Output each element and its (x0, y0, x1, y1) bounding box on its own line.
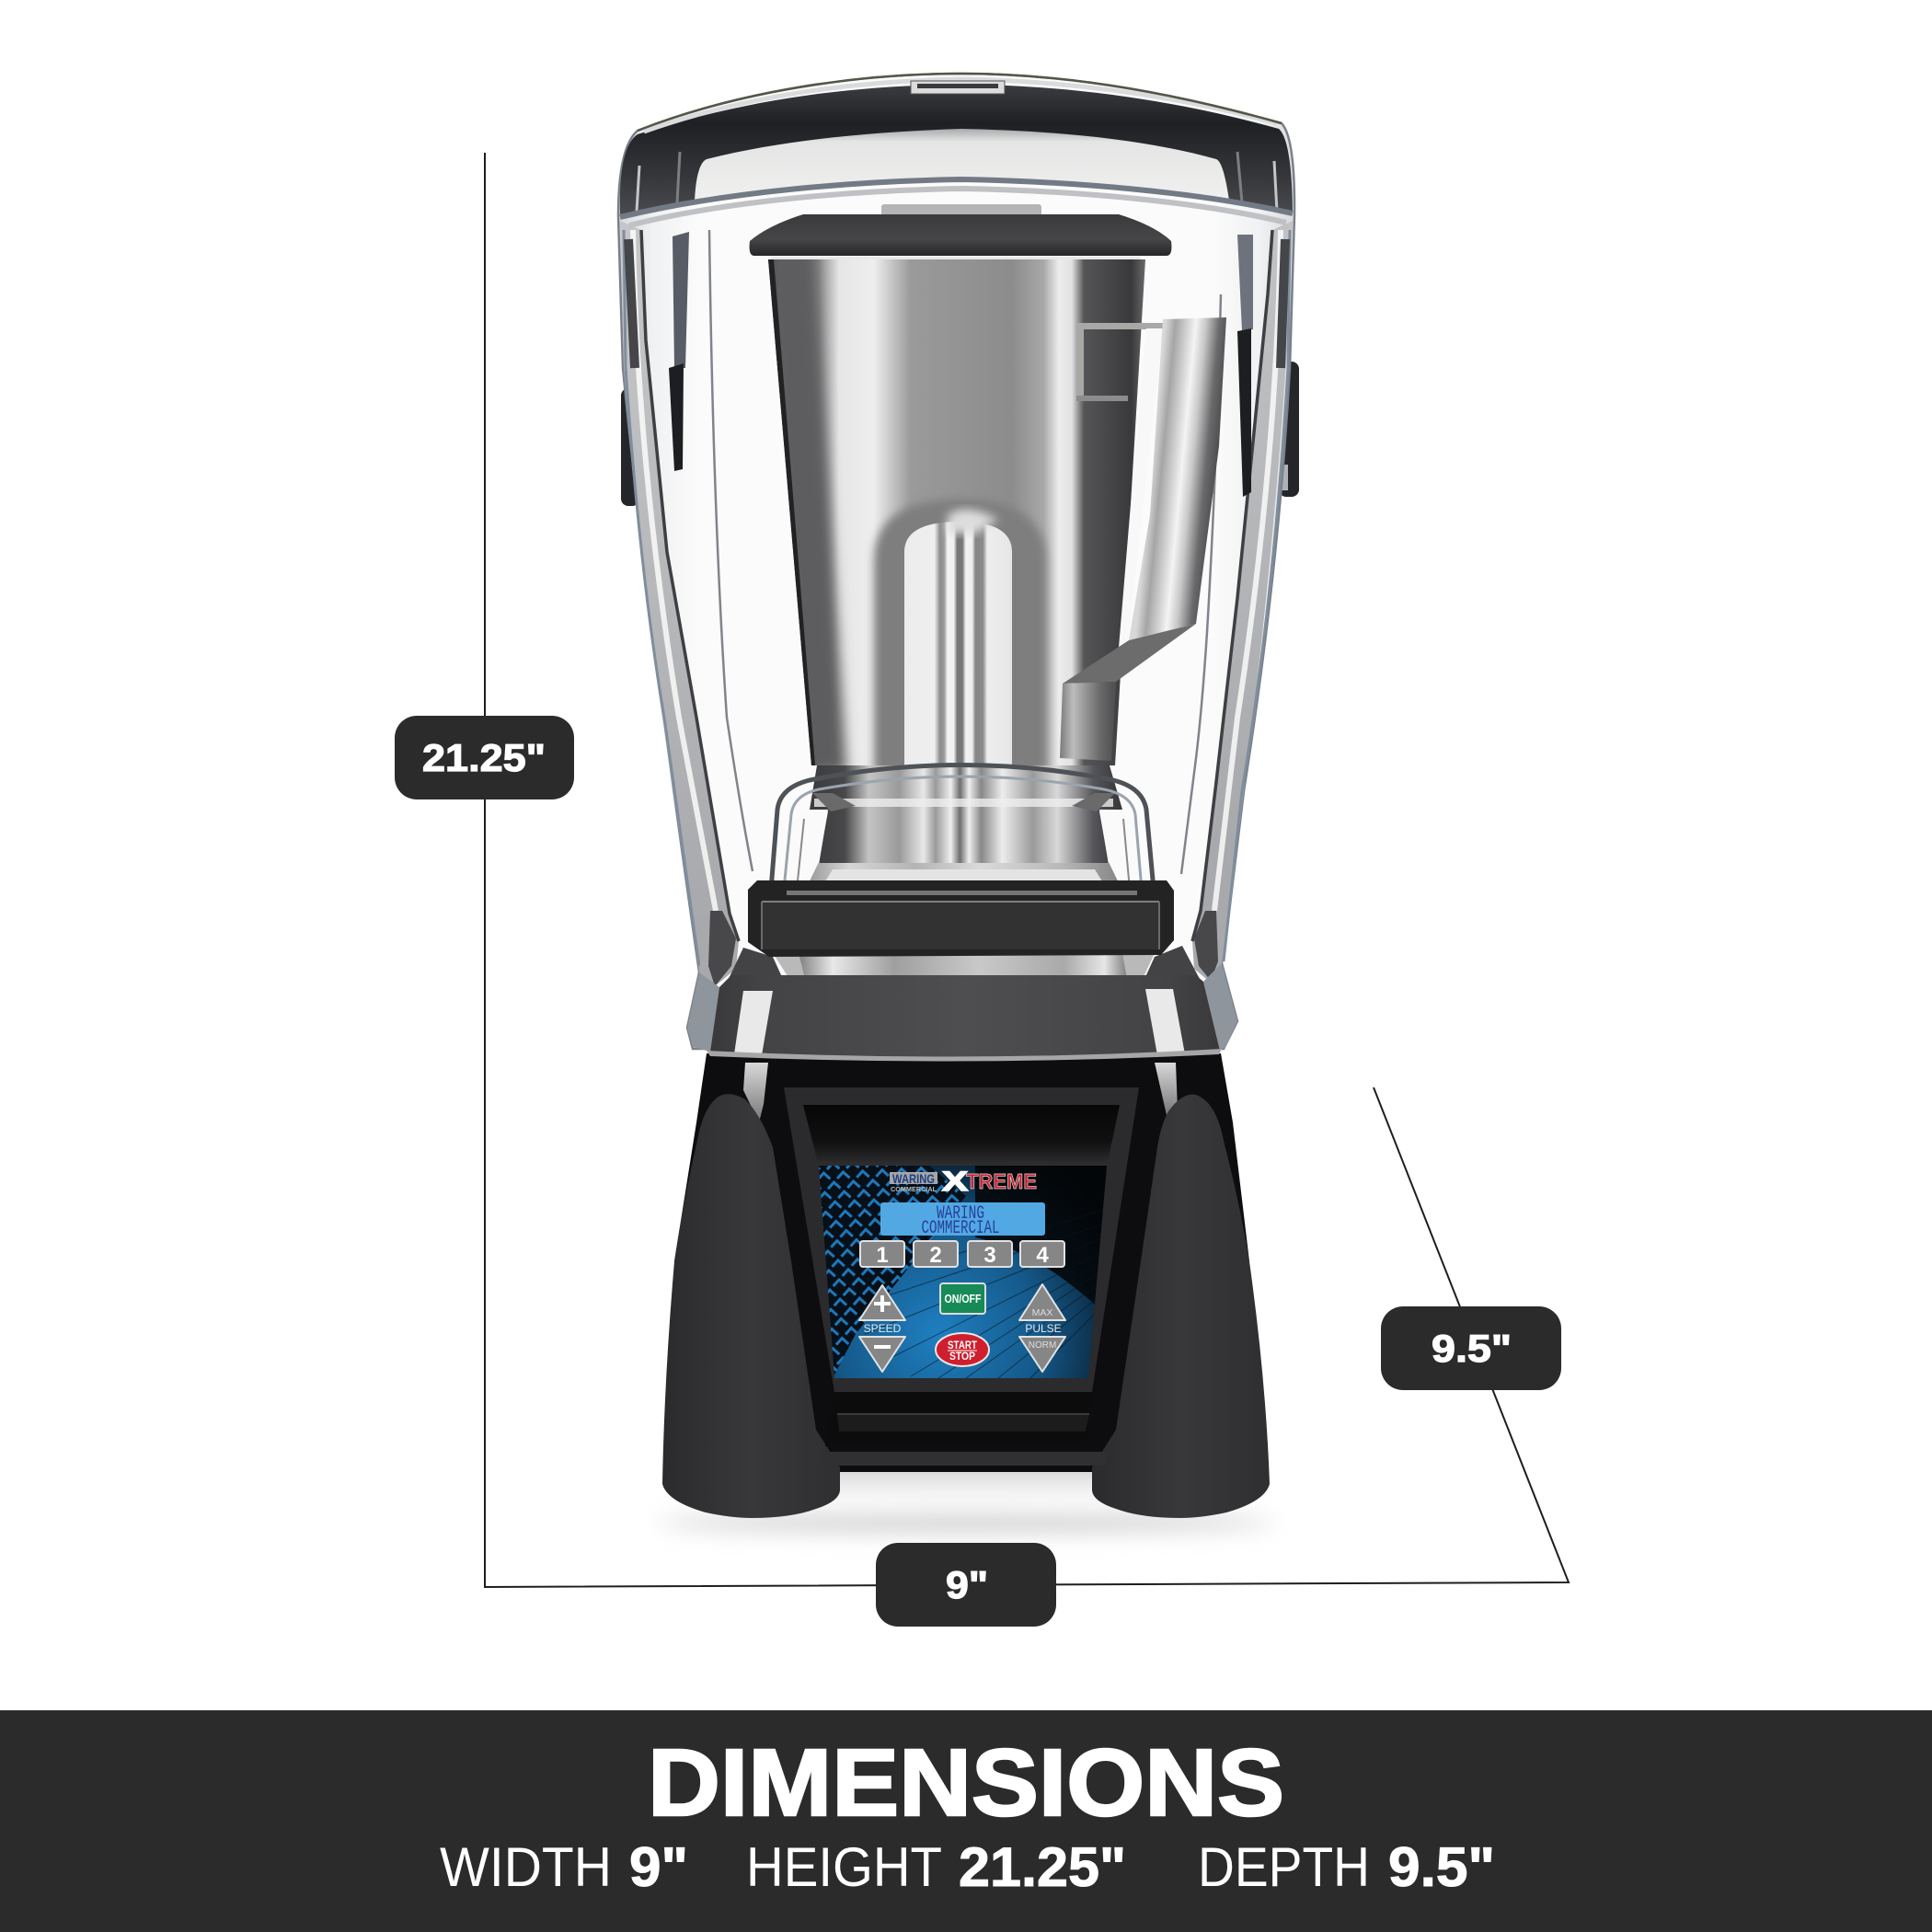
footer banner (0, 1710, 1932, 1932)
enclosure flare: right (1203, 963, 1237, 1051)
width label (876, 1543, 1056, 1627)
preset buttons: 2 (929, 1243, 942, 1268)
banner title: DIMENSIONS (648, 1730, 1284, 1835)
jar handle (1060, 317, 1226, 761)
clear collar around jar base (771, 765, 1154, 891)
lower panel housing (825, 1392, 1092, 1446)
width spec: WIDTH (440, 1836, 612, 1898)
speed controls: SPEED (864, 1322, 902, 1335)
logo: Xtreme (942, 1167, 1037, 1197)
preset buttons: 4 (1036, 1243, 1049, 1268)
lid seam (620, 179, 1293, 217)
left foot (662, 1094, 840, 1518)
height spec (746, 1836, 1126, 1898)
start/stop button (936, 1333, 989, 1366)
stainless jar body (764, 248, 1145, 773)
base glints (743, 1063, 1178, 1122)
LCD display (880, 1202, 1045, 1239)
blender product illustration (618, 74, 1299, 1533)
enclosure inner reflections (669, 230, 1253, 874)
base underside bridge (819, 1452, 1109, 1466)
pulse controls (1019, 1284, 1065, 1372)
black pedestal bar (748, 880, 1174, 957)
preset buttons: 3 (983, 1243, 996, 1268)
control panel face (819, 1166, 1107, 1378)
logo: Xtreme: TREME (966, 1169, 1037, 1193)
preset buttons: 1 (876, 1243, 889, 1268)
left enclosure wall (620, 221, 739, 986)
jar shaft arch (874, 500, 1046, 773)
enclosure lid band (620, 85, 1293, 214)
logo: Xtreme: X (942, 1167, 968, 1197)
floor shadow (658, 1512, 1274, 1533)
preset buttons (860, 1241, 1064, 1268)
depth label: 9.5" (1432, 1327, 1512, 1370)
deck (707, 975, 1222, 1062)
wedges beside pedestal (727, 946, 1201, 983)
steel strip under pedestal (773, 953, 1155, 979)
icon: side knob left (621, 388, 639, 506)
logo: Waring Commercial: COMMERCIAL (891, 1187, 937, 1193)
pulse controls: NORM (1029, 1340, 1056, 1351)
depth spec: 9.5" (1388, 1836, 1495, 1898)
height label (395, 716, 574, 799)
dimension lines (485, 153, 1569, 1587)
control panel bezel (784, 1087, 1139, 1392)
base body (674, 1053, 1249, 1472)
depth spec (1198, 1836, 1495, 1898)
lid top highlight and label plate (637, 74, 1282, 212)
clear enclosure shell (618, 74, 1294, 1049)
height label: 21.25" (422, 736, 546, 779)
on/off button (940, 1283, 985, 1314)
start/stop button: STOP (949, 1351, 975, 1363)
jar shaft core (904, 522, 1012, 773)
right foot (1092, 1095, 1270, 1518)
pulse controls: PULSE (1025, 1322, 1062, 1335)
enclosure flare: left (687, 972, 719, 1052)
height spec: HEIGHT (746, 1836, 942, 1898)
width label: 9" (946, 1563, 988, 1606)
lid light window (695, 129, 1229, 201)
depth label (1381, 1306, 1561, 1390)
width spec: 9" (629, 1836, 688, 1898)
control panel recess (803, 1105, 1120, 1167)
height spec: 21.25" (959, 1836, 1126, 1898)
right enclosure wall (1192, 221, 1293, 983)
on/off button: ON/OFF (944, 1292, 982, 1305)
LCD display: WARING (937, 1203, 984, 1225)
LCD display: COMMERCIAL (922, 1218, 999, 1239)
speed controls (859, 1285, 905, 1372)
pulse controls: MAX (1032, 1307, 1052, 1318)
logo: Waring Commercial (890, 1171, 937, 1193)
jar lid (750, 204, 1171, 259)
shadow between feet (833, 1463, 1099, 1520)
icon: side knob right (1279, 362, 1299, 497)
start/stop button: START (948, 1340, 977, 1351)
depth spec: DEPTH (1198, 1836, 1370, 1898)
logo: Waring Commercial: WARING (892, 1171, 935, 1186)
